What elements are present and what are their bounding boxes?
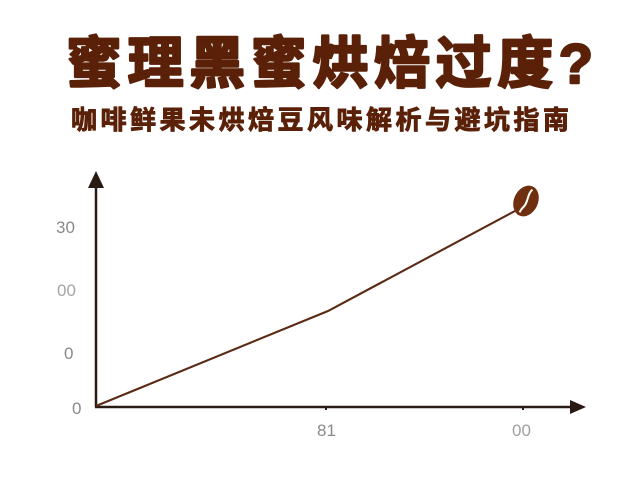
y axis with arrow (88, 171, 104, 407)
x axis with arrow (95, 400, 586, 414)
y axis labels: 0 (64, 344, 73, 363)
subtitle: 咖啡鲜果未烘焙豆风味解析与避坑指南 (71, 105, 573, 135)
y axis labels: 30 (56, 218, 75, 237)
x axis labels (317, 421, 531, 440)
y axis labels: 00 (57, 281, 76, 300)
trend line (96, 211, 515, 406)
x axis labels: 81 (317, 421, 336, 440)
title: 蜜理黑蜜烘焙过度? (66, 32, 599, 95)
x axis labels: 00 (512, 421, 531, 440)
y axis labels (56, 218, 81, 418)
icon: coffee bean (508, 181, 544, 221)
y axis labels: 0 (72, 399, 81, 418)
